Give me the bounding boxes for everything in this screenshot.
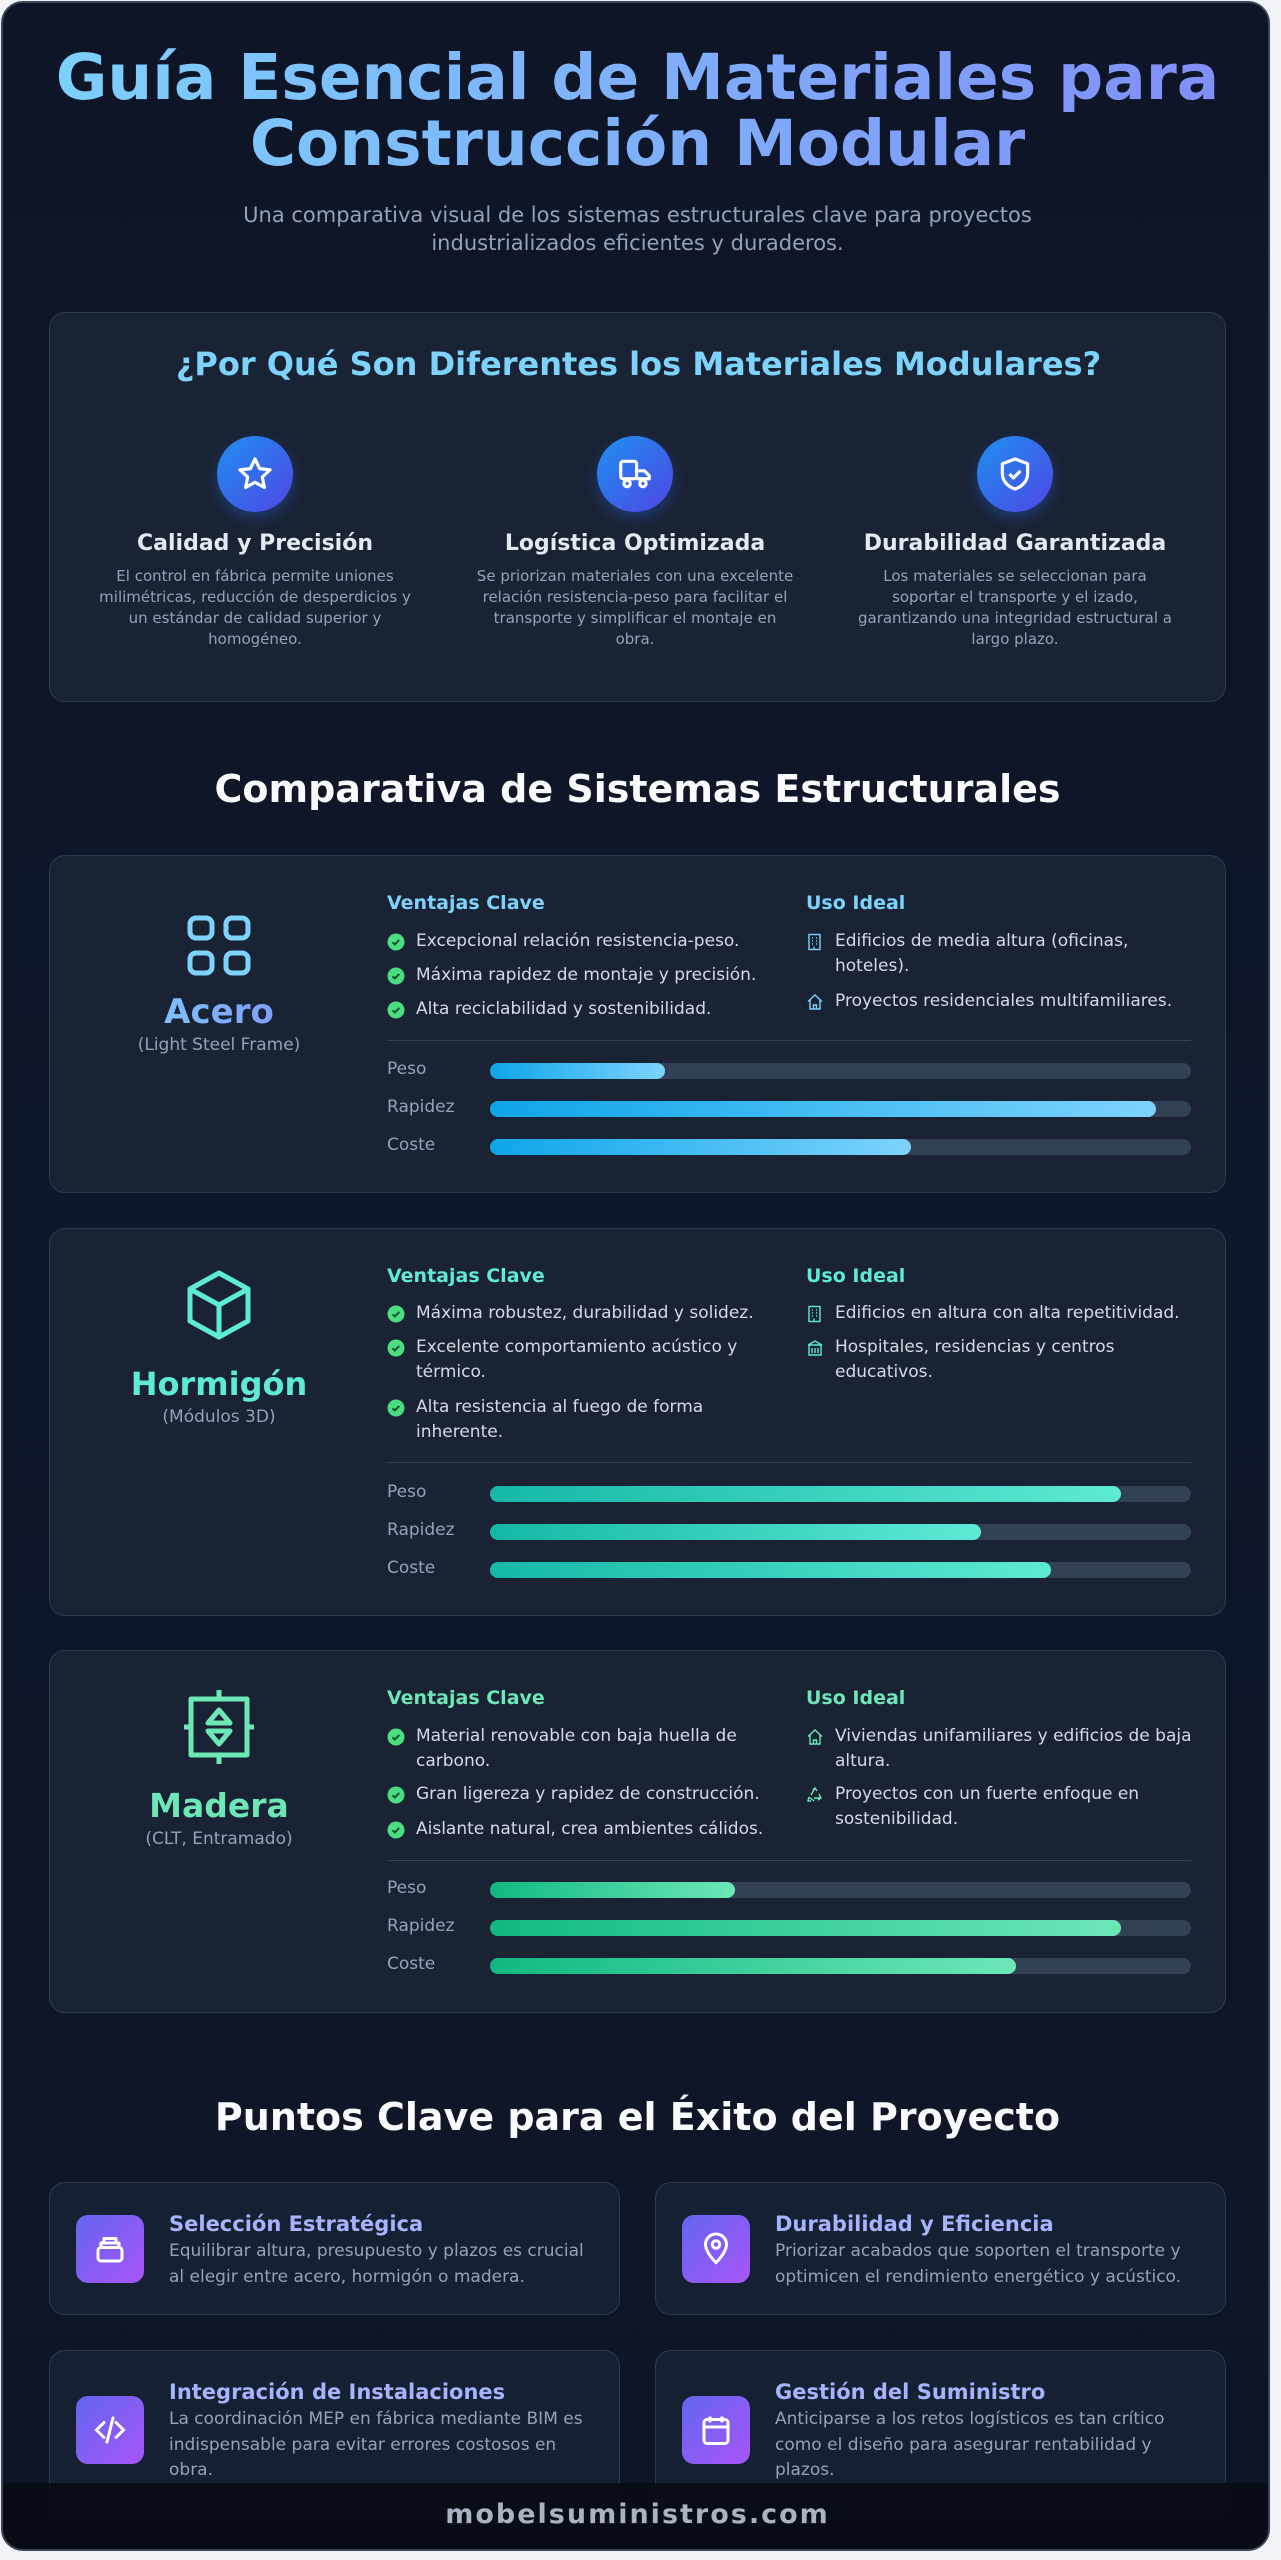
- icon: shield: [977, 436, 1053, 512]
- panel: hormigon: Excelente comportamiento acústico y térmico.: [416, 1337, 737, 1382]
- section heading: puntos clave: Puntos Clave para el Éxito del Proyecto: [215, 2095, 1060, 2139]
- panel: madera: Viviendas unifamiliares y edificios de baja altura.: [835, 1726, 1192, 1771]
- bar chart: Rapidez: [387, 1097, 455, 1117]
- feature: logistica: Se priorizan materiales con una excelente relación resistencia-peso para facilitar el transporte y simplificar el montaje en obra.: [477, 567, 793, 648]
- feature: calidad: El control en fábrica permite uniones milimétricas, reducción de desperdicios y un estándar de calidad superior y homogéneo.: [99, 567, 411, 648]
- feature: logistica: [477, 436, 793, 648]
- bar chart: Coste: [387, 1135, 435, 1155]
- ideal use: Uso Ideal: [806, 892, 905, 914]
- panel: why modular: [49, 312, 1226, 702]
- panel: hormigon: Edificios en altura con alta repetitividad.: [835, 1303, 1180, 1323]
- ideal use: Uso Ideal: [806, 1265, 905, 1287]
- feature: durabilidad: Durabilidad Garantizada: [864, 531, 1166, 556]
- bar chart: [387, 1059, 1191, 1155]
- icon: grid: [188, 916, 250, 976]
- icon: truck: [597, 436, 673, 512]
- material name: (CLT, Entramado): [145, 1829, 293, 1849]
- title: Construcción Modular: [250, 107, 1025, 180]
- panel: madera: Aislante natural, crea ambientes cálidos.: [416, 1819, 763, 1839]
- panel: madera: [49, 1650, 1226, 2013]
- panel: hormigon: Alta resistencia al fuego de forma inherente.: [416, 1397, 703, 1442]
- card: integracion: La coordinación MEP en fábrica mediante BIM es indispensable para evitar errores costosos en obra.: [169, 2409, 583, 2480]
- icon: timber module: [184, 1690, 254, 1764]
- feature: durabilidad: [858, 436, 1172, 648]
- card: suministro: Gestión del Suministro: [775, 2380, 1045, 2404]
- panel heading: ¿Por Qué Son Diferentes los Materiales Modulares?: [176, 345, 1101, 383]
- panel: madera: Material renovable con baja huella de carbono.: [416, 1726, 737, 1771]
- material name: [138, 992, 300, 1055]
- card: durabilidad: [655, 2182, 1226, 2315]
- panel: hormigon: [49, 1228, 1226, 1616]
- panel: acero: [49, 855, 1226, 1193]
- material name: Madera: [149, 1786, 289, 1825]
- card: durabilidad: Durabilidad y Eficiencia: [775, 2212, 1054, 2236]
- card: suministro: [655, 2350, 1226, 2520]
- material name: Hormigón: [131, 1365, 307, 1403]
- icon: code: [76, 2396, 144, 2464]
- card: durabilidad: Priorizar acabados que soporten el transporte y optimicen el rendimiento energético y acústico.: [775, 2241, 1181, 2286]
- advantages: Ventajas Clave: [387, 1687, 545, 1709]
- panel: acero: Excepcional relación resistencia-peso.: [416, 931, 739, 951]
- bar chart: [387, 1878, 1191, 1974]
- bar chart: Peso: [387, 1878, 426, 1898]
- card: suministro: Anticiparse a los retos logísticos es tan crítico como el diseño para asegurar rentabilidad y plazos.: [775, 2409, 1164, 2480]
- feature: calidad: [99, 436, 411, 648]
- material name: [131, 1365, 307, 1427]
- icon: calendar: [682, 2396, 750, 2464]
- material name: (Módulos 3D): [162, 1407, 276, 1427]
- bar chart: Coste: [387, 1558, 435, 1578]
- feature: durabilidad: Los materiales se seleccionan para soportar el transporte y el izado, garantizando una integridad estructural a largo plazo.: [858, 567, 1172, 648]
- panel: madera: Gran ligereza y rapidez de construcción.: [416, 1784, 760, 1804]
- advantages: Ventajas Clave: [387, 1265, 545, 1287]
- icon: pin: [682, 2215, 750, 2283]
- icon: layers: [76, 2215, 144, 2283]
- subtitle: Una comparativa visual de los sistemas estructurales clave para proyectos: [243, 203, 1032, 227]
- panel: acero: Proyectos residenciales multifamiliares.: [835, 991, 1172, 1011]
- footer: [3, 2483, 1272, 2553]
- subtitle: industrializados eficientes y duraderos.: [431, 231, 844, 255]
- panel: madera: Proyectos con un fuerte enfoque en sostenibilidad.: [835, 1784, 1139, 1829]
- card: integracion: [49, 2350, 620, 2520]
- material name: (Light Steel Frame): [138, 1035, 300, 1055]
- card: integracion: Integración de Instalaciones: [169, 2380, 505, 2404]
- advantages: Ventajas Clave: [387, 892, 545, 914]
- bar chart: Rapidez: [387, 1520, 455, 1540]
- card: seleccion: [49, 2182, 620, 2315]
- bar chart: Coste: [387, 1954, 435, 1974]
- feature: calidad: Calidad y Precisión: [137, 531, 373, 556]
- footer: mobelsuministros.com: [445, 2499, 830, 2530]
- panel: acero: Edificios de media altura (oficinas, hoteles).: [835, 931, 1128, 976]
- material name: Acero: [164, 992, 274, 1032]
- panel: hormigon: Máxima robustez, durabilidad y solidez.: [416, 1303, 754, 1323]
- bar chart: Rapidez: [387, 1916, 455, 1936]
- icon: cube: [188, 1270, 250, 1340]
- card: seleccion: Equilibrar altura, presupuesto y plazos es crucial al elegir entre acero, hormigón o madera.: [169, 2241, 584, 2286]
- title: [3, 45, 1272, 177]
- feature: logistica: Logística Optimizada: [505, 531, 765, 556]
- bar chart: Peso: [387, 1059, 426, 1079]
- icon: star: [217, 436, 293, 512]
- bar chart: Peso: [387, 1482, 426, 1502]
- panel: hormigon: Hospitales, residencias y centros educativos.: [835, 1337, 1114, 1382]
- section heading: comparativa: Comparativa de Sistemas Estructurales: [215, 767, 1060, 811]
- card: seleccion: Selección Estratégica: [169, 2212, 423, 2236]
- panel: acero: Máxima rapidez de montaje y precisión.: [416, 965, 756, 985]
- title: Guía Esencial de Materiales para: [56, 41, 1219, 114]
- material name: [145, 1786, 293, 1849]
- panel: acero: Alta reciclabilidad y sostenibilidad.: [416, 999, 711, 1019]
- ideal use: Uso Ideal: [806, 1687, 905, 1709]
- bar chart: [387, 1482, 1191, 1578]
- subtitle: [243, 203, 1032, 255]
